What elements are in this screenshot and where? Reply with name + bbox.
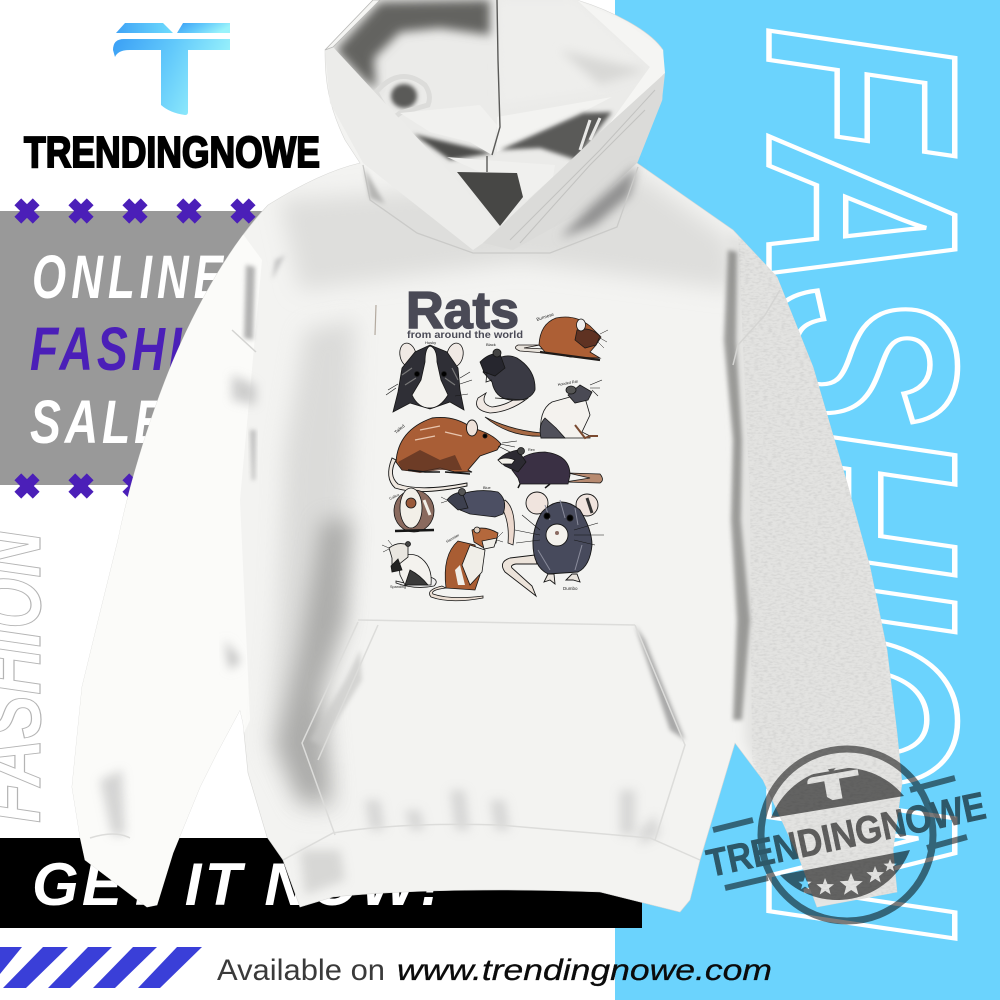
rat: burmese: Burmese bbox=[536, 311, 555, 322]
stamp lower dome with stars bbox=[780, 850, 910, 900]
logo: gradient T mark bbox=[113, 23, 230, 115]
grey sale panel bbox=[0, 211, 300, 485]
stamp ring bbox=[761, 749, 933, 921]
print mark near left chest bbox=[375, 305, 376, 335]
icon row: purple crosses bottom bbox=[9, 468, 153, 504]
rat: calico: Calico bbox=[389, 493, 400, 501]
heading: online: ONLINE bbox=[32, 244, 228, 312]
hood top left rim bbox=[325, 0, 380, 50]
heading: fashion: FASHION bbox=[30, 316, 263, 384]
rat: calico bbox=[389, 488, 434, 532]
availability text: Available on bbox=[217, 954, 385, 987]
hoodie shading bbox=[72, 148, 958, 924]
rat: hooded bbox=[485, 379, 602, 438]
call to action text: GET IT NOW! bbox=[32, 851, 444, 918]
rat: hooded: Hooded Rat bbox=[557, 379, 579, 387]
rat: rex: Rex bbox=[528, 448, 535, 452]
hood interior bbox=[333, 0, 650, 227]
rat: husky portrait: Husky bbox=[425, 340, 436, 345]
stamp T mark bbox=[805, 763, 862, 804]
rat: standard brown: Tailed bbox=[393, 423, 406, 435]
stamp side bars bbox=[713, 778, 967, 888]
hood right flap bbox=[483, 73, 665, 250]
background: sky blue panel bbox=[615, 0, 1000, 1000]
hood flap stitching and collar bbox=[363, 90, 655, 253]
heading: sale: SALE bbox=[30, 389, 169, 457]
rats print bbox=[382, 282, 608, 601]
rat: hamster standing: Hamster bbox=[446, 533, 461, 544]
rat: rex bbox=[498, 448, 602, 488]
rat: blue bbox=[441, 486, 514, 545]
icon row: purple crosses top bbox=[9, 193, 261, 229]
rat: standard brown bbox=[389, 417, 517, 492]
hood right rim bbox=[577, 0, 665, 123]
rat: small white: Spanding bbox=[390, 585, 406, 589]
hood left flap bbox=[325, 47, 500, 250]
rat: husky portrait bbox=[386, 340, 472, 412]
print subtitle: from around the world bbox=[407, 329, 523, 341]
rat: burmese bbox=[515, 311, 608, 360]
rat: black bbox=[476, 342, 535, 413]
rat: dumbo bbox=[502, 492, 604, 596]
rat: dumbo: Dumbo bbox=[563, 586, 578, 591]
logo wordmark: TRENDINGNOWE bbox=[24, 128, 320, 177]
print title: Rats: Rats bbox=[406, 282, 519, 340]
stamp stars bbox=[798, 859, 897, 895]
blue diagonal stripes bbox=[0, 947, 202, 988]
rat: black: Black bbox=[486, 342, 496, 347]
pocket seams bbox=[90, 620, 890, 860]
stamp upper dome bbox=[771, 768, 904, 818]
watermark stamp bbox=[703, 749, 990, 921]
website url: www.trendingnowe.com bbox=[397, 954, 772, 987]
raglan shoulder seams bbox=[232, 290, 780, 365]
rat: hamster standing bbox=[429, 527, 503, 601]
hoodie silhouette bbox=[72, 0, 902, 912]
hoodie bbox=[60, 0, 920, 920]
black call to action bar bbox=[0, 838, 642, 928]
rat: blue: Blue bbox=[483, 486, 491, 490]
rat: small white bbox=[382, 540, 436, 589]
